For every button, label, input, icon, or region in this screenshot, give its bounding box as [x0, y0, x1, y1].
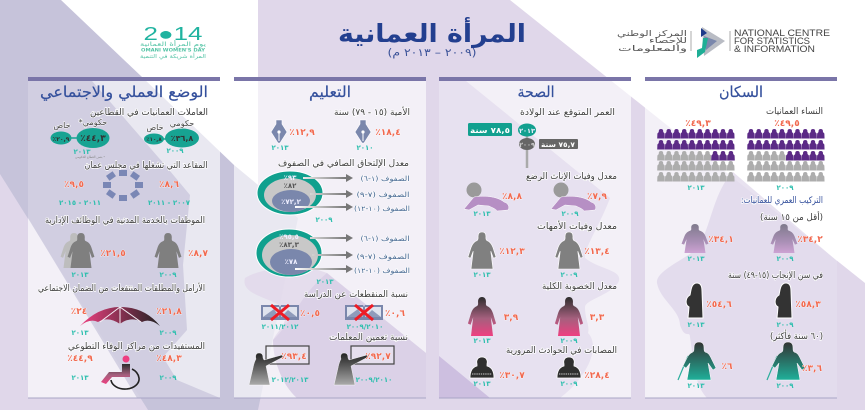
chart: sector bubbles: حكومي — [170, 119, 194, 128]
chart: enrolment 2013: ٢٠١٣ — [316, 278, 334, 286]
chart: enrolment 2009: الصفوف (٧-٩) — [356, 191, 410, 199]
panel: population — [645, 77, 837, 398]
text: illiteracy: الأمية (١٥ - ٧٩) سنة — [334, 106, 410, 118]
panel: education: ٠,٥٪ — [300, 309, 320, 319]
panel: population: ٢٠٠٩ — [776, 321, 794, 329]
panel: social and economic status: ٢٠٠٩ — [159, 329, 177, 337]
panel: population: ٢٠١٣ — [687, 382, 705, 390]
panel: education: ١٢,٩٪ — [289, 128, 315, 138]
logo: Omani Women's Day 2014: يوم المرأة العمانية — [140, 40, 206, 48]
icon: council seats — [103, 170, 143, 201]
panel: health: ٢٠١٣ — [473, 337, 491, 345]
chart: enrolment 2013: ٨٣,٣٪ — [279, 241, 300, 249]
heading: الصحة — [518, 83, 554, 101]
icon: elderly women — [678, 342, 805, 380]
chart: pictogram 2013 — [657, 129, 735, 182]
chart: enrolment 2009: ٨٢٪ — [284, 182, 297, 190]
panel: education: ٢٠١١/٢٠١٢ — [262, 323, 299, 331]
chart: enrolment 2013: الصفوف (٧-٩) — [356, 253, 410, 261]
panel: social and economic status: ٢٠١٣ — [71, 271, 89, 279]
text: road accidents: المصابات في الحوادث المرورية — [506, 346, 617, 356]
panel: education: ١٨,٤٪ — [375, 128, 401, 138]
panel: health: ٧,٩٪ — [587, 192, 607, 202]
text: under 15: (أقل من ١٥ سنة) — [760, 211, 823, 223]
panel: health: ٣,٣ — [590, 313, 605, 323]
panel: social and economic status: ٢٠٠٩ — [159, 374, 177, 382]
text: maternal mortality: معدل وفيات الأمهات — [537, 220, 617, 232]
panel: education: ٢٠٠٩/٢٠١٠ — [347, 323, 383, 331]
panel: health: ٢٨,٤٪ — [584, 371, 610, 381]
panel: social and economic status: ٢٤٪ — [71, 307, 87, 317]
panel: health: ١٢,٣٪ — [499, 247, 525, 257]
chart: enrolment 2009: ٢٠٠٩ — [315, 216, 333, 224]
chart: enrolment 2009: ٩٣٪ — [284, 174, 297, 182]
panel: social and economic status: ٢٠١٣ — [71, 374, 89, 382]
chart: enrolment 2009: الصفوف (١٠-١٢) — [354, 205, 410, 213]
panel: population: ٦٪ — [722, 362, 733, 372]
title: المرأة العمانية — [338, 17, 526, 49]
logo: Omani Women's Day 2014: 2●14 — [144, 24, 202, 44]
logo: National Centre for Statistics and Information: للإحصاء — [649, 36, 687, 46]
panel: social and economic status: ٨,٧٪ — [188, 249, 208, 259]
panel: population: ٢٠١٣ — [687, 184, 705, 192]
logo: Omani Women's Day 2014 — [140, 24, 207, 60]
panel: population: ٢٠٠٩ — [776, 184, 794, 192]
panel: social and economic status: ٨,٦٪ — [159, 180, 179, 190]
panel: health: ٢٠١٣ — [473, 380, 491, 388]
logo: National Centre for Statistics and Information: المركز الوطني — [617, 29, 687, 38]
text: dropouts: نسبة المنقطعات عن الدراسة — [304, 290, 408, 300]
text: widows: الأرامل والمطلقات المنتفعات من الضمان الاجتماعي — [38, 282, 205, 294]
text: workers in sectors: العاملات العمانيات في القطاعين — [90, 108, 208, 118]
chart: enrolment 2013: ٧٨٪ — [285, 258, 298, 266]
panel: population: ٢٠١٣ — [687, 255, 705, 263]
chart: enrolment 2013: الصفوف (١-٦) — [360, 235, 410, 243]
chart: sector bubbles: ٢٠٠٩ — [166, 147, 184, 155]
panel: social and economic status: ٢٠١٣ — [71, 329, 89, 337]
panel: social and economic status: ٩,٥٪ — [64, 180, 84, 190]
chart: enrolment 2009 — [257, 171, 410, 224]
icon: umbrella — [80, 307, 160, 326]
panel: health: ٢٠٠٩ — [560, 337, 578, 345]
panel: population: ٢٠٠٩ — [776, 382, 794, 390]
panel: health: ٢٠١٣ — [473, 210, 491, 218]
chart: enrolment 2009: ٧٢,٢٪ — [281, 198, 302, 206]
panel: education: ٢٠١٢/٢٠١٣ — [272, 376, 309, 384]
chart: life expectancy timeline: ٧٥,٧ سنة — [541, 141, 576, 149]
text: over 60: (٦٠ سنة فأكثر) — [770, 329, 823, 342]
logo: Omani Women's Day 2014: OMANI WOMEN'S DAY — [141, 48, 205, 52]
text: fertility: معدل الخصوبة الكلية — [542, 282, 617, 292]
chart: sector bubbles: حكومي* — [79, 118, 107, 127]
icon: crossed books — [261, 305, 383, 320]
logo: National Centre for Statistics and Information — [617, 27, 830, 58]
heading: الوضع العملي والاجتماعي — [40, 83, 208, 102]
panel: health: ٣٠,٧٪ — [499, 371, 525, 381]
text: age structure: التركيب العمري للعمانيات: — [741, 196, 823, 206]
panel: health: ٢٠٠٩ — [561, 210, 579, 218]
panel: social and economic status: ٤٤,٩٪ — [67, 354, 93, 364]
panel: education: ٢٠١٠ — [356, 144, 374, 152]
subtitle: years: (٢٠٠٩ – ٢٠١٣ م) — [388, 47, 476, 59]
text: volunteer centres: المستفيدات من مراكز الوفاء التطوعي — [68, 342, 205, 352]
panel: health — [439, 77, 631, 398]
chart: sector bubbles: خاص — [53, 121, 71, 130]
panel: population: ٢٠٠٩ — [776, 255, 794, 263]
chart: sector bubbles: خاص — [146, 123, 164, 132]
chart: life expectancy timeline: ٢٠٠٩ — [519, 141, 535, 149]
icon: girls — [682, 224, 797, 253]
panel: population: ٤٩,٥٪ — [774, 119, 800, 129]
text: net enrolment: معدل الإلتحاق الصافي في الصفوف — [278, 159, 409, 169]
panel: population: ٤٩,٣٪ — [685, 119, 711, 129]
heading: التعليم — [309, 83, 351, 101]
panel: education: ٠,٦٪ — [385, 309, 405, 319]
panel: population: ٥٤,٦٪ — [706, 300, 732, 310]
icon: mothers — [468, 232, 583, 269]
chart: life expectancy timeline: ٢٠١٣ — [519, 127, 535, 135]
icon: injured women — [470, 357, 581, 378]
text: civil service: الموظفات بالخدمة المدنية في الوظائف الإدارية — [45, 216, 205, 226]
panel: social and economic status: ٢٠٠٩ — [159, 271, 177, 279]
text: life expectancy: العمر المتوقع عند الولادة — [520, 108, 615, 118]
logo: National Centre for Statistics and Information: FOR STATISTICS — [734, 36, 810, 46]
text: council seats: المقاعد التي تشغلها في مجلس عمان — [84, 161, 208, 171]
panel: education: ٩٢,٧٪ — [365, 352, 391, 362]
chart: sector bubbles: * بعض القطاع الحكومي — [75, 155, 105, 159]
text: reproductive age: في سن الإنجاب (١٥-٤٩) سنة — [728, 271, 823, 281]
logo: National Centre for Statistics and Information: والمعلومات — [618, 44, 687, 53]
panel: health: ٢٠٠٩ — [560, 271, 578, 279]
chart: sector bubbles: ٣٦,٨٪ — [171, 134, 193, 143]
chart: sector bubbles: ٤٤,٣٪ — [80, 134, 106, 144]
panel: population: ٥٨,٣٪ — [795, 300, 821, 310]
heading: السكان — [719, 83, 763, 101]
icon: employees — [61, 233, 181, 268]
panel: population: ٣,٦٪ — [802, 364, 822, 374]
panel: education: ٢٠٠٩/٢٠١٠ — [356, 376, 392, 384]
chart: sector bubbles: ٢٠١٣ — [73, 148, 91, 156]
chart: sector bubbles: ٢٠,٩٪ — [53, 136, 70, 143]
panel: health: ١٣,٤٪ — [584, 247, 610, 257]
panel: health: ٢٠١٣ — [473, 271, 491, 279]
panel: population: ٣٤,١٪ — [708, 235, 734, 245]
panel: health: ٢٠٠٩ — [560, 380, 578, 388]
chart: enrolment 2013 — [256, 229, 410, 286]
chart: enrolment 2013: ٩٥,٥٪ — [279, 233, 299, 241]
icon: wheelchair — [101, 356, 139, 389]
text: teachers: نسبة تعمين المعلمات — [329, 333, 408, 343]
panel: social and economic status: ٢١,٨٪ — [156, 307, 182, 317]
chart: life expectancy timeline: ٧٨,٥ سنة — [470, 126, 510, 135]
panel: population: ٣٤,٢٪ — [797, 235, 823, 245]
panel: social and economic status — [28, 77, 220, 398]
panel: education: ٢٠١٣ — [271, 144, 289, 152]
text: Omani women: النساء العمانيات — [766, 107, 823, 117]
icon: teachers at boards — [249, 346, 394, 385]
logo: Omani Women's Day 2014: المرأة شريكة في التنمية — [140, 52, 207, 60]
panel: population: ٢٠١٣ — [687, 321, 705, 329]
logo: National Centre for Statistics and Information: & INFORMATION — [734, 44, 815, 54]
panel: social and economic status: ٢٠٠٧ - ٢٠١١ — [148, 199, 191, 207]
panel: education — [234, 77, 426, 398]
title — [338, 17, 526, 59]
icon: pen nibs — [271, 120, 371, 143]
chart: pictogram 2009 — [747, 129, 825, 182]
chart: enrolment 2009: الصفوف (١-٦) — [360, 175, 410, 183]
icon: pregnant women — [686, 283, 792, 318]
chart: sector bubbles — [50, 118, 199, 159]
text: infant mortality: معدل وفيات الإناث الرضع — [526, 172, 617, 182]
chart: life expectancy timeline — [468, 123, 578, 168]
panel: health: ٣,٩ — [504, 313, 519, 323]
icon: fertility figures — [468, 297, 583, 336]
panel: education: ٩٣,٤٪ — [281, 352, 307, 362]
panel: health: ٨,٨٪ — [502, 192, 522, 202]
chart: sector bubbles: ١٠,٨٪ — [146, 137, 162, 143]
panel: social and economic status: ٢١,٥٪ — [100, 249, 126, 259]
chart: enrolment 2013: الصفوف (١٠-١٢) — [354, 267, 410, 275]
panel: social and economic status: ٤٨,٣٪ — [156, 354, 182, 364]
logo: National Centre for Statistics and Information: NATIONAL CENTRE — [734, 28, 830, 38]
panel: social and economic status: ٢٠١١ - ٢٠١٥ — [59, 199, 101, 207]
icon: crawling babies — [464, 182, 596, 211]
